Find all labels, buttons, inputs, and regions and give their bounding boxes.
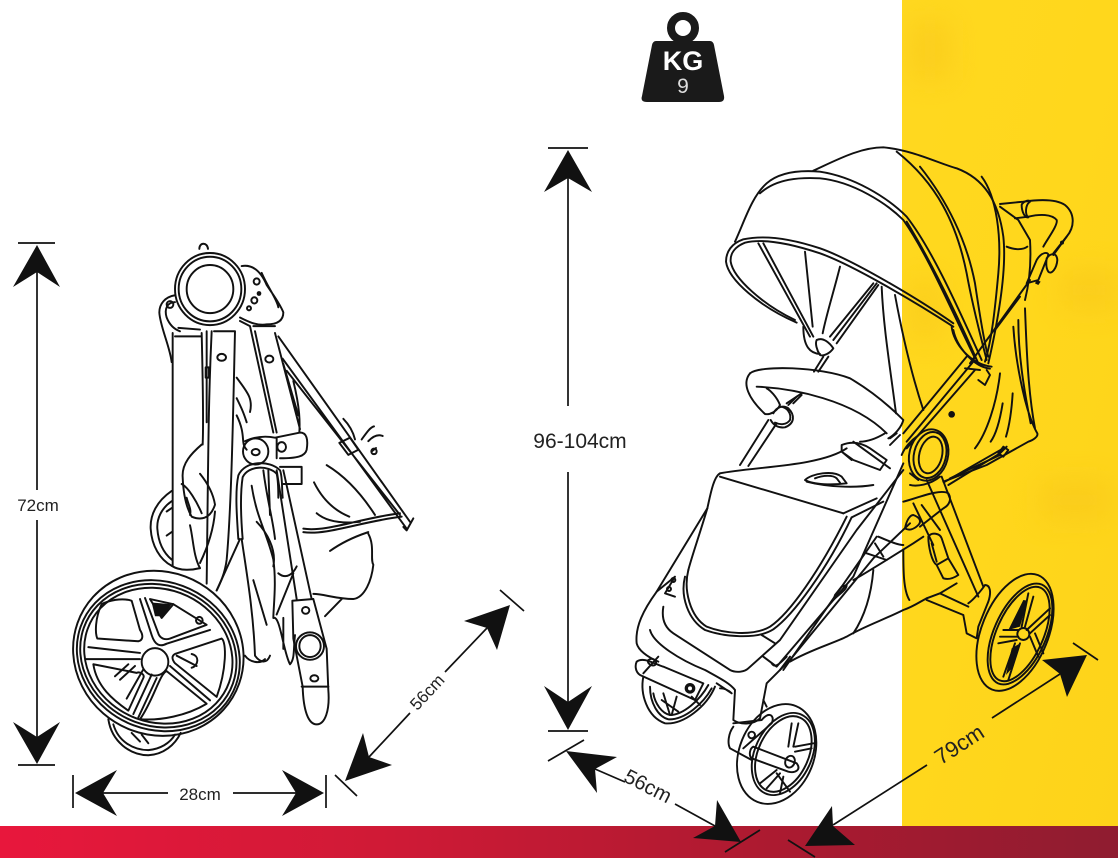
rear frame and caliper — [903, 447, 1007, 638]
yellow panel — [902, 0, 1118, 826]
dimension: stroller length 79cm — [788, 643, 1098, 857]
footmuff — [684, 448, 883, 636]
folded seat fabric and canopy — [278, 336, 413, 616]
dimension: stroller height 96-104cm: 96-104cm — [533, 430, 627, 453]
dimension: folded height 72cm — [13, 243, 60, 765]
dimension: folded width 28cm: 28cm — [179, 785, 221, 804]
lower tube and end cap — [292, 599, 329, 724]
folded fabric — [182, 445, 297, 664]
large rear wheel — [50, 546, 266, 760]
dimension: stroller length 79cm: 79cm — [930, 719, 989, 770]
mid hinge bracket and loop — [236, 433, 307, 539]
dimension: folded depth 56cm: 56cm — [406, 671, 448, 714]
icon: weight 9 kg: KG — [663, 46, 703, 76]
side hinge — [902, 425, 954, 485]
dimension: stroller height 96-104cm — [533, 148, 627, 731]
dimension: folded height 72cm: 72cm — [17, 496, 59, 515]
seat back — [788, 287, 923, 413]
shoulder straps — [842, 433, 900, 470]
front left wheel — [636, 657, 715, 723]
rear right wheel — [961, 563, 1069, 702]
dimension: stroller width 56cm: 56cm — [620, 765, 675, 808]
folded frame tubes — [172, 321, 312, 599]
canopy struts — [758, 243, 878, 355]
canopy — [726, 147, 1004, 369]
illustration: open stroller lower part — [636, 447, 1069, 816]
top folding hinge — [159, 244, 283, 362]
front right wheel — [717, 683, 831, 816]
dimension: stroller width 56cm — [548, 740, 760, 852]
rear seat fabric — [943, 308, 1037, 482]
dimension: folded depth 56cm — [335, 590, 524, 796]
rear wheels behind — [108, 491, 181, 755]
dimension: folded width 28cm — [73, 770, 326, 816]
rear frame arm — [903, 280, 1030, 448]
lower seat frame — [636, 463, 923, 724]
icon: weight 9 kg: 9 — [677, 75, 689, 98]
underseat basket — [790, 550, 927, 662]
bumper bar — [740, 368, 903, 466]
red footer band — [0, 826, 1118, 858]
illustration: open stroller upper part — [726, 147, 1073, 485]
icon: weight 9 kg — [642, 16, 724, 102]
rear handle — [1000, 200, 1073, 300]
illustration: folded stroller — [50, 244, 413, 760]
